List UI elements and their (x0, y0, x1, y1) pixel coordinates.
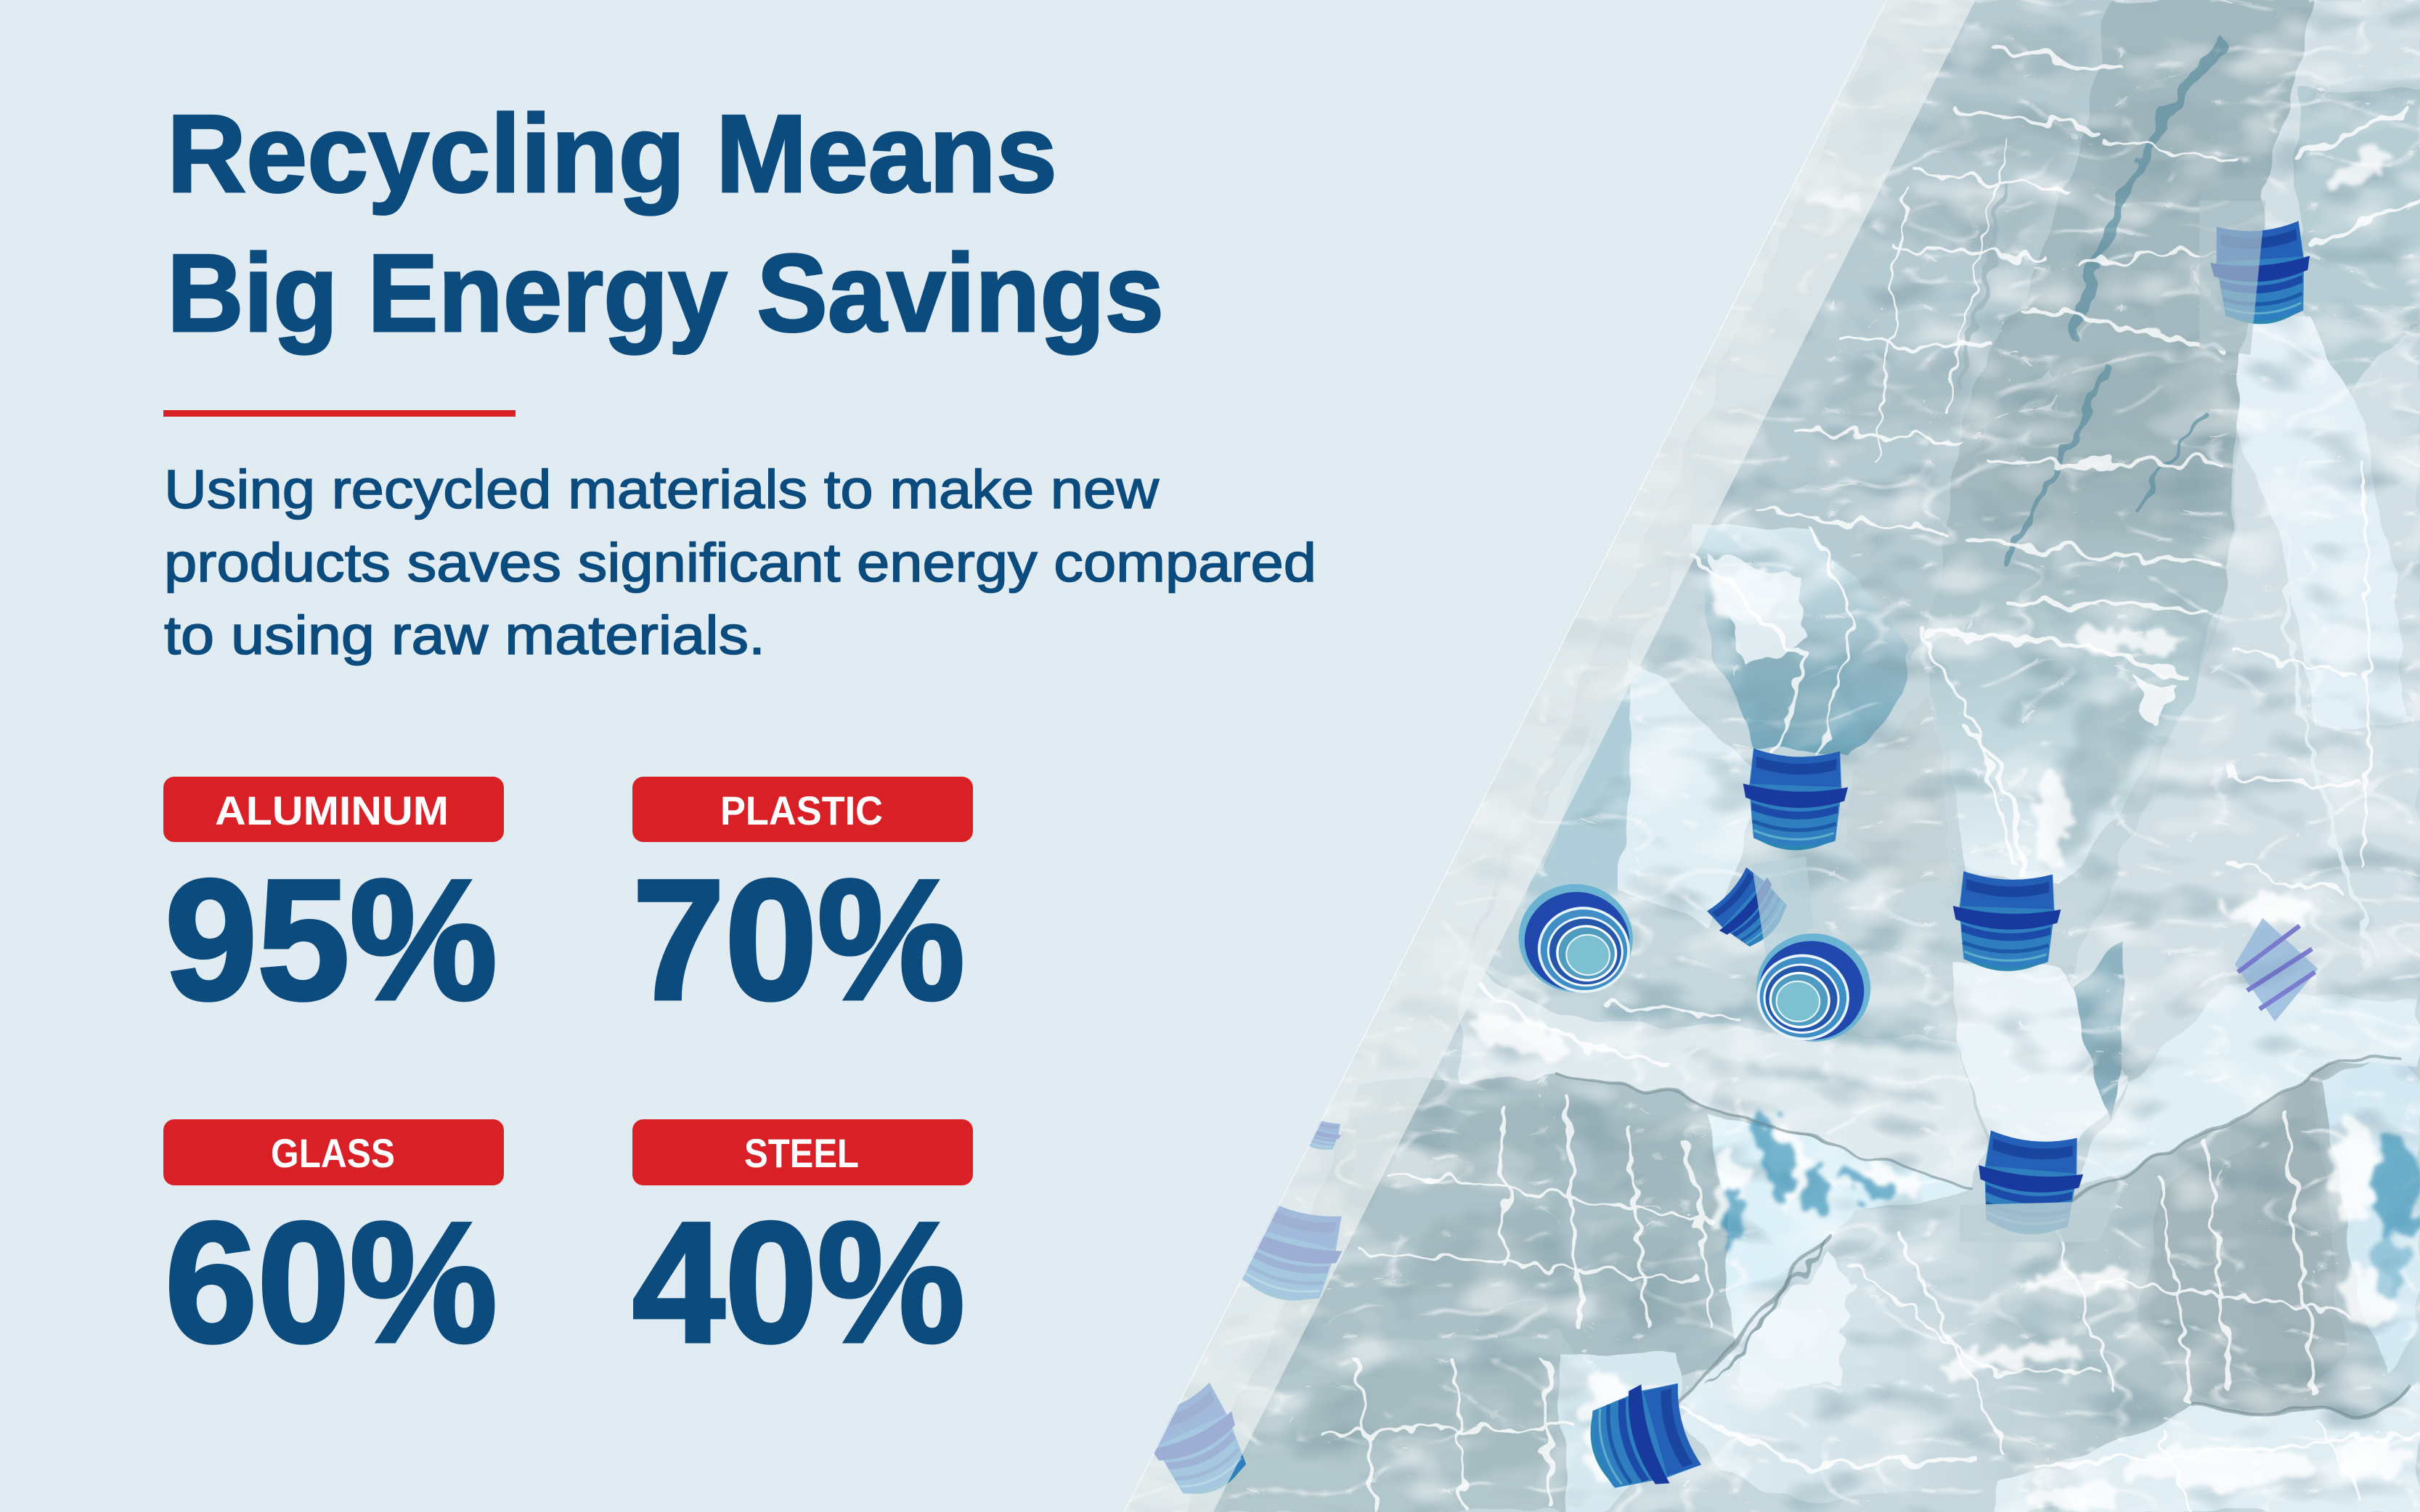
plastic label pill (632, 777, 973, 842)
red divider (163, 410, 516, 417)
texture overlays (1080, 0, 2420, 1512)
pale cap small (1295, 1114, 1344, 1154)
pockets lower left (1297, 1098, 1706, 1474)
crumple ridges (1327, 46, 2420, 1512)
translucent cover on tilted cap (1752, 857, 1814, 965)
stat: plastic (632, 777, 973, 1036)
right mid blue white crumple (2076, 987, 2420, 1188)
big bottle funnel edge (1706, 1238, 1830, 1389)
title line 1: Recycling Means (167, 92, 1057, 216)
top right crumple (2297, 85, 2420, 401)
right side light bottles (2068, 0, 2420, 1111)
crumple blue light patch lower left (1559, 1350, 1682, 1512)
bottle cap: bottom (1579, 1375, 1704, 1501)
big bottom bottle (1676, 1057, 2420, 1500)
under-bottle white (1597, 655, 1759, 925)
glass percentage: 60% (165, 1187, 497, 1378)
purple piece (2235, 918, 2318, 1021)
light blotches (1080, 0, 2420, 1512)
intro line 2: products saves significant energy compared (164, 532, 1316, 593)
gray wedge on neck bottle (2076, 944, 2124, 1119)
bottle cap: top right (2208, 221, 2314, 327)
second lower-left bottle (1189, 1335, 1597, 1512)
bottle cap: lower neck (1973, 1129, 2086, 1239)
crumpled bottle upper left (1451, 0, 2114, 987)
blue streaks on central bottle (1960, 46, 2223, 563)
aluminum percentage: 95% (165, 844, 497, 1036)
aluminum label: ALUMINUM (215, 788, 449, 833)
bottle regions (1189, 0, 2420, 1512)
stat: aluminum (163, 777, 504, 1036)
stat: glass (163, 1119, 504, 1378)
title line 2: Big Energy Savings (167, 232, 1164, 355)
bright plastic highlights (1468, 140, 2417, 1509)
funnel highlights (1706, 555, 1806, 663)
white top bottle body (2238, 318, 2405, 725)
steel percentage: 40% (632, 1187, 965, 1378)
bottle cap: center right (1951, 871, 2062, 973)
white lower neck bottle (1952, 960, 2127, 1150)
teal blobs in crumple (1729, 1115, 2420, 1296)
white overlay band (1123, 0, 1976, 1512)
pockets upper left (1814, 23, 2223, 532)
central crumple gray patch (1844, 695, 1952, 887)
funnel bottle (1693, 526, 1911, 759)
central large bottle (1921, 0, 2315, 886)
intro text (164, 459, 1316, 666)
dark edge lines (1560, 1057, 2409, 1412)
horizontal bottle shade (1744, 1065, 1929, 1098)
aluminum label pill (163, 777, 504, 842)
glass label pill (163, 1119, 504, 1185)
ring cap left (1513, 878, 1638, 998)
plastic label: PLASTIC (720, 788, 883, 833)
steel label pill (632, 1119, 973, 1185)
bottom right light plastic (1991, 1381, 2420, 1512)
central bottle lower shadow (2045, 695, 2176, 864)
pale cap lower (1136, 1379, 1259, 1508)
translucent bottle over lower cap (1960, 1191, 2122, 1242)
translucent bottle over top cap (2199, 200, 2265, 355)
small tilted cap (1703, 863, 1797, 957)
left blue bottle neck (1520, 679, 1633, 910)
horizontal light bottle (1459, 965, 1988, 1190)
title (167, 92, 1164, 355)
gray bottle body shadows (2138, 1111, 2346, 1407)
shadow pockets (1297, 23, 2223, 1474)
fine veins (1080, 0, 2420, 1512)
plastic percentage: 70% (632, 844, 965, 1036)
lower left dark bottle (1204, 1069, 1830, 1512)
stat: steel (632, 1119, 973, 1378)
blue-white crumple zone (1706, 1111, 1973, 1358)
facets (1706, 555, 1852, 1397)
big bottle funnel highlight (1736, 1250, 1852, 1397)
intro line 1: Using recycled materials to make new (164, 459, 1160, 520)
steel label: STEEL (744, 1130, 859, 1176)
photo: crushed plastic bottles (1080, 0, 2420, 1512)
intro line 3: to using raw materials. (164, 605, 765, 666)
photo base tone (1080, 0, 2420, 1512)
pale caps in band (1228, 1193, 1350, 1311)
teal crumple at right (2323, 1057, 2420, 1373)
funnel inner shadow (1729, 617, 1867, 740)
band edge (1123, 0, 1886, 1512)
glass label: GLASS (271, 1130, 395, 1176)
horizontal bottle shadow band (1605, 1010, 1948, 1047)
ring cap right (1751, 928, 1876, 1047)
bottle cap: funnel (1741, 748, 1849, 852)
